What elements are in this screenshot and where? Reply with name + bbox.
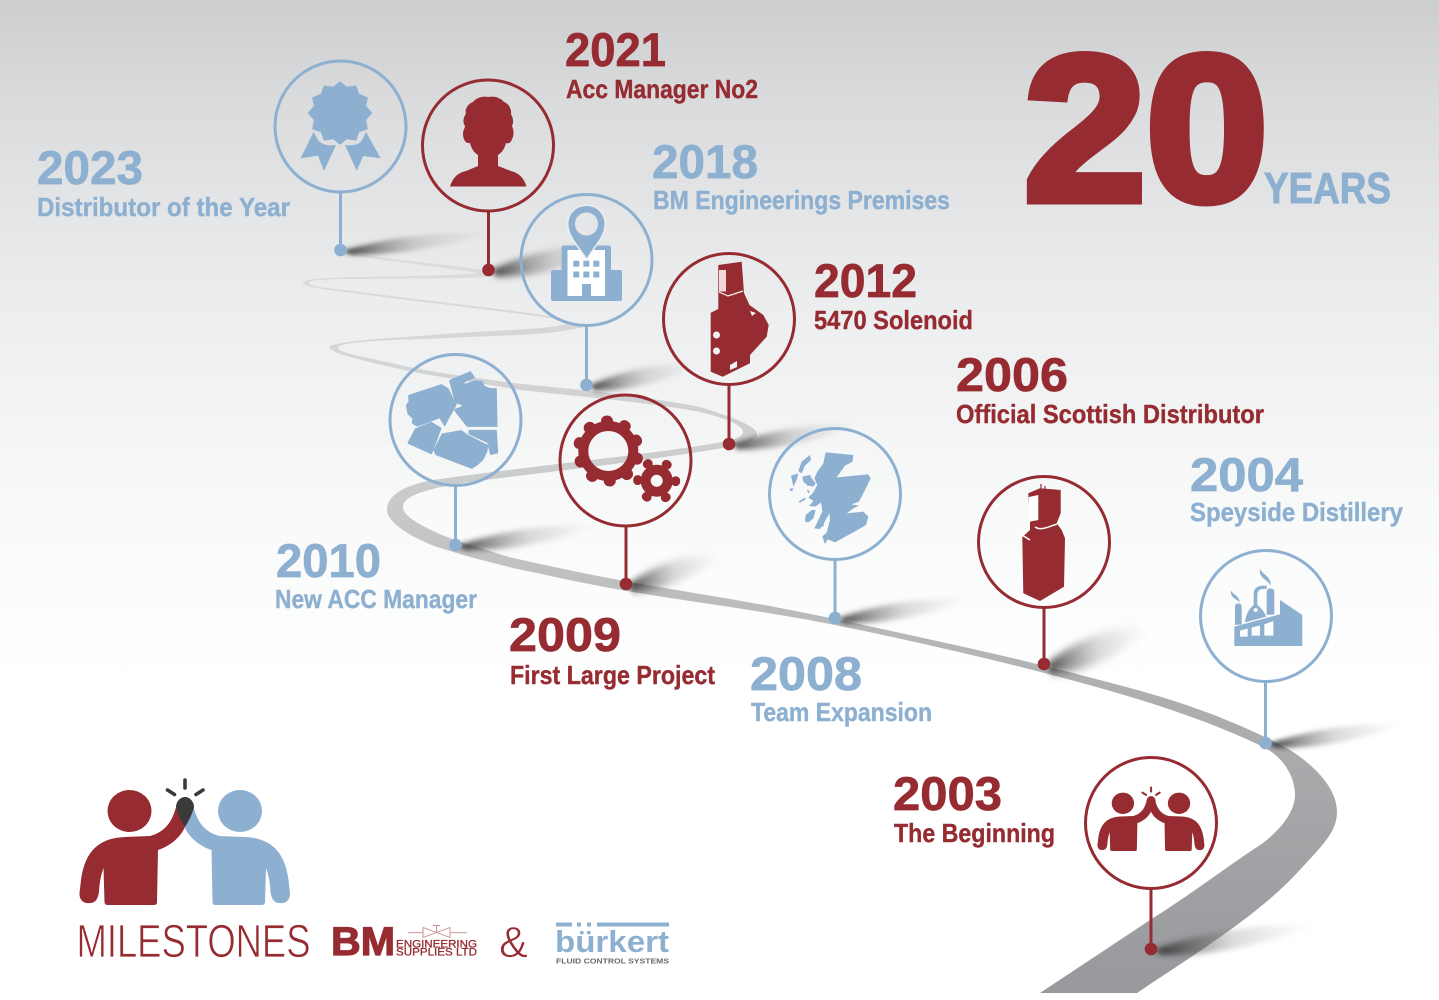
icon: person (450, 97, 526, 186)
pin shadows (342, 232, 1404, 955)
icon: team hands (407, 372, 497, 468)
icon: distillery factory (1231, 569, 1302, 646)
caption 2003: The Beginning (894, 818, 1055, 848)
icon: building with location marker (551, 206, 622, 301)
pin 2023 (275, 61, 406, 192)
icon: gears (572, 415, 676, 500)
heading 2021: 2021 (565, 23, 666, 76)
pin 2009 (560, 395, 691, 526)
supplies ltd: SUPPLIES LTD (396, 946, 477, 958)
milestone 2009: first large project (509, 395, 715, 690)
caption 2021: Acc Manager No2 (566, 74, 758, 104)
dot 2021 (482, 264, 495, 276)
heading 2003: 2003 (893, 767, 1002, 820)
clapping hands and rays (168, 780, 203, 827)
stem 2009 (624, 526, 628, 584)
milestone 2018: premises (521, 135, 950, 391)
milestone 2004: speyside distillery (1190, 448, 1403, 749)
dot (1038, 658, 1050, 670)
heading 2009: 2009 (509, 608, 621, 661)
dot 2018 (580, 379, 593, 391)
stem 2003 (1150, 889, 1152, 949)
pin 2006 (770, 428, 900, 560)
stem 2021 (487, 211, 490, 270)
top bar (556, 922, 669, 926)
tagline: FLUID CONTROL SYSTEMS (556, 956, 669, 966)
milestone 2010: new acc manager (275, 354, 521, 614)
heading 2010: 2010 (276, 534, 381, 587)
number 20: 20 (1024, 13, 1268, 244)
caption 2012: 5470 Solenoid (814, 305, 973, 335)
logo: burkert (555, 922, 669, 966)
stem 2018 (585, 326, 588, 385)
heading 2006: 2006 (956, 348, 1068, 401)
dot 2009 (620, 578, 632, 590)
stem 2004 (1264, 682, 1267, 743)
pin: solenoid (978, 476, 1110, 608)
burkert name: bürkert (555, 924, 669, 959)
milestone 2021: acc manager no2 (422, 23, 758, 276)
milestone 2008: team expansion (750, 476, 1110, 727)
stem 2012 (728, 385, 730, 444)
dot 2010 (449, 539, 462, 551)
dot 2006 (829, 612, 841, 624)
caption 2008: Team Expansion (751, 697, 932, 727)
stem 2023 (339, 192, 342, 250)
milestone 2006: official scottish distributor (770, 348, 1264, 624)
pin 2021 (422, 80, 554, 211)
caption 2009: First Large Project (510, 660, 715, 690)
engineering: ENGINEERING (396, 938, 477, 950)
dot 2003 (1145, 943, 1157, 955)
icon: high five (1097, 788, 1204, 851)
dot 2023 (334, 244, 347, 256)
milestone 2023: distributor of the year (37, 61, 406, 256)
wordmark: milestones: MILESTONES (76, 915, 310, 967)
pin 2010 (390, 354, 521, 486)
icon: valve (408, 926, 467, 938)
icon: tall solenoid (1022, 484, 1065, 601)
caption 2023: Distributor of the Year (37, 192, 290, 222)
pin 2018 (521, 194, 652, 326)
caption 2010: New ACC Manager (275, 584, 477, 614)
pin 2012 (664, 254, 794, 384)
stem 2006 (834, 560, 836, 618)
milestone 2012: 5470 solenoid (664, 254, 973, 450)
big title: 20 years (1024, 13, 1391, 244)
pin 2003 (1086, 758, 1216, 888)
heading 2004: 2004 (1190, 448, 1303, 501)
caption 2018: BM Engineerings Premises (653, 185, 950, 215)
heading 2008: 2008 (750, 647, 862, 700)
caption 2004: Speyside Distillery (1190, 497, 1403, 527)
caption 2006: Official Scottish Distributor (956, 399, 1264, 429)
heading 2023: 2023 (37, 141, 143, 194)
winding road (303, 249, 1337, 993)
logo: milestones high five (79, 780, 290, 905)
icon: rosette award (300, 82, 381, 171)
dot 2004 (1259, 737, 1272, 749)
red figure (79, 790, 185, 905)
blue figure (184, 790, 290, 905)
pin 2004 (1200, 550, 1332, 682)
heading 2018: 2018 (652, 135, 758, 188)
icon: solenoid valve (711, 262, 769, 377)
heading 2012: 2012 (814, 254, 917, 307)
bm letters: BM (331, 920, 395, 964)
word years: YEARS (1264, 164, 1391, 213)
stem 2010 (454, 486, 457, 545)
stem (1042, 608, 1046, 664)
logo: bm engineering supplies (331, 920, 477, 964)
dot 2012 (723, 438, 735, 450)
ampersand: & (499, 918, 528, 967)
milestone 2003: the beginning (893, 758, 1216, 955)
icon: map of scotland (790, 452, 871, 544)
